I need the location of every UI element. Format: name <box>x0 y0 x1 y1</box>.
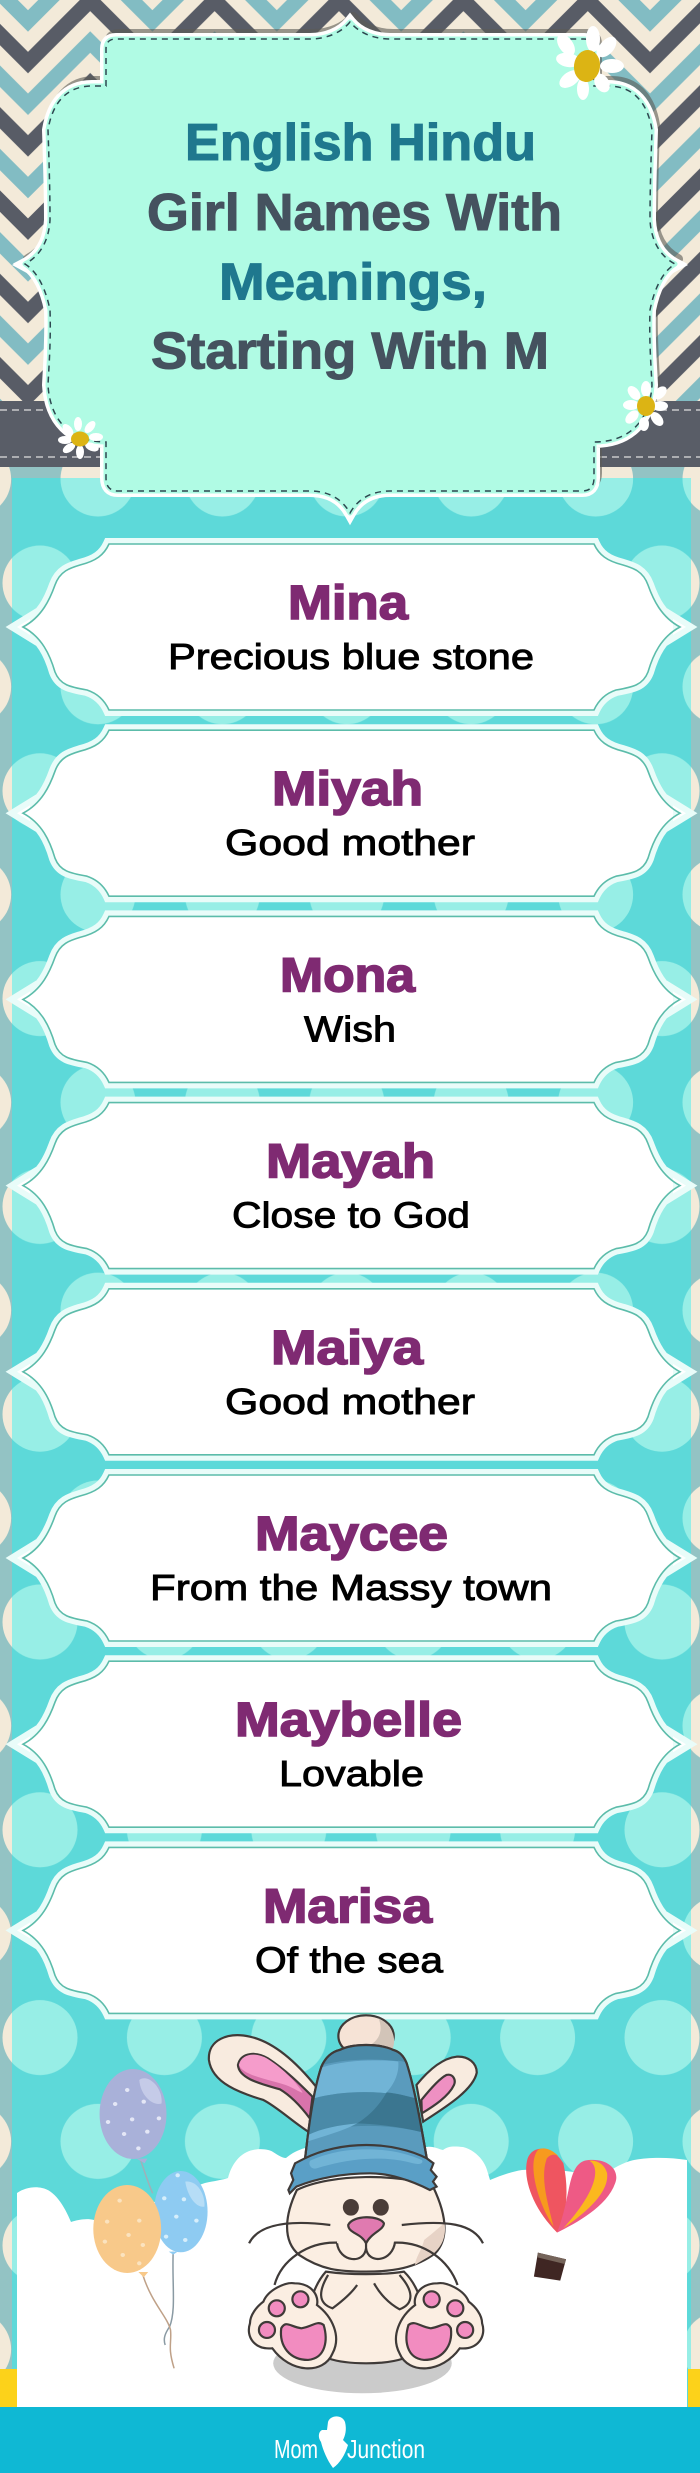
name: Mina <box>288 577 408 630</box>
panel: name card Maycee <box>17 1475 686 1641</box>
title text: Meanings, <box>219 254 487 312</box>
icon: small daisy right <box>623 381 669 431</box>
footer band <box>0 2407 700 2473</box>
purple balloon <box>100 2069 167 2163</box>
right foot <box>396 2283 483 2368</box>
name: Maiya <box>271 1322 423 1375</box>
logo: MomJunction <box>274 2416 425 2468</box>
meaning: From the Massy town <box>150 1567 552 1608</box>
eyes <box>343 2199 389 2216</box>
title panel <box>12 13 688 521</box>
illustration: bunny in a blue hat <box>209 2015 483 2393</box>
left foot <box>249 2283 336 2368</box>
panel: name card Mina <box>17 544 686 710</box>
yellow corner blocks <box>0 2369 700 2407</box>
name: Mayah <box>266 1136 435 1189</box>
name: Miyah <box>272 763 423 816</box>
dark stitched band <box>0 401 700 467</box>
name: Maycee <box>255 1508 448 1561</box>
title text <box>147 114 562 380</box>
icon: large daisy top right <box>553 26 624 100</box>
white clouds <box>17 2146 687 2408</box>
meaning: Lovable <box>279 1753 424 1794</box>
meaning: Precious blue stone <box>168 636 534 677</box>
name: Mona <box>280 949 415 1002</box>
panel: name card Mona <box>17 916 686 1082</box>
hat <box>288 2045 437 2193</box>
panel: name card Maiya <box>17 1289 686 1455</box>
icon: mother and child <box>319 2416 348 2468</box>
icon: small daisy left <box>58 417 103 459</box>
body <box>307 2272 425 2363</box>
panel: name card Marisa <box>17 1847 686 2013</box>
nose <box>348 2217 384 2243</box>
right lobe <box>557 2160 616 2233</box>
mouth and whiskers <box>249 2223 483 2285</box>
polka dot background <box>0 466 700 2411</box>
orange balloon <box>93 2185 161 2277</box>
chevron background <box>0 0 700 402</box>
meaning: Of the sea <box>255 1939 444 1980</box>
title text: Girl Names With <box>147 184 562 242</box>
meaning: Good mother <box>225 822 475 863</box>
logo: MomJunction: Junction <box>347 2434 425 2464</box>
blue balloon <box>154 2171 208 2255</box>
meaning: Good mother <box>225 1381 475 1422</box>
name: Maybelle <box>235 1694 462 1747</box>
meaning: Close to God <box>232 1195 470 1236</box>
right ear <box>416 2057 477 2122</box>
illustration: heart hot air balloon <box>526 2148 616 2281</box>
strings <box>141 2160 174 2368</box>
title text: English Hindu <box>185 114 536 172</box>
name: Marisa <box>263 1880 432 1933</box>
left lobe <box>526 2149 567 2233</box>
meaning: Wish <box>304 1008 396 1049</box>
basket <box>534 2253 566 2281</box>
title text: Starting With M <box>151 322 549 380</box>
panel: name card Mayah <box>17 1103 686 1269</box>
head <box>287 2177 445 2272</box>
panel: name card Maybelle <box>17 1661 686 1827</box>
logo: MomJunction: Mom <box>274 2434 318 2464</box>
illustration: balloons <box>93 2069 208 2368</box>
pompom <box>338 2015 394 2057</box>
shadow <box>273 2333 452 2393</box>
left ear <box>209 2035 316 2133</box>
panel: name card Miyah <box>17 730 686 896</box>
